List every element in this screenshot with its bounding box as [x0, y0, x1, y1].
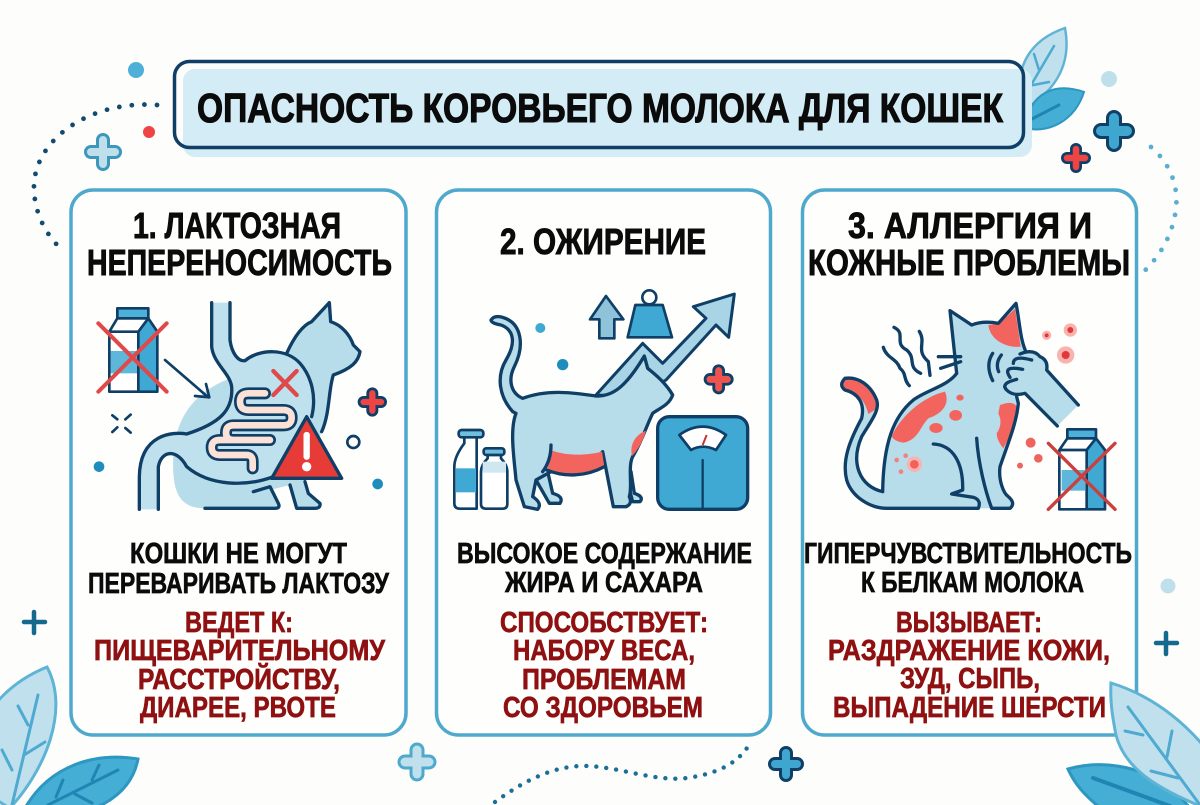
decoration: dotted arc left: [34, 105, 157, 248]
text: consequences: ВЫПАДЕНИЕ ШЕРСТИ: [833, 692, 1106, 724]
panel: allergy and skin problems: [802, 190, 1136, 735]
illustration: scratching cat: [842, 303, 1115, 509]
heading 2: 2. ОЖИРЕНИЕ: [500, 221, 706, 262]
leaves bottom right: [1068, 683, 1200, 805]
heading 1: [87, 205, 392, 283]
text: consequences: РАССТРОЙСТВУ,: [138, 662, 340, 696]
title: ОПАСНОСТЬ КОРОВЬЕГО МОЛОКА ДЛЯ КОШЕК: [197, 85, 1004, 131]
text: consequences: [500, 607, 708, 724]
weight: [628, 290, 672, 337]
dots: [94, 436, 383, 489]
panel: lactose intolerance: [71, 190, 406, 735]
small up arrow: [590, 296, 623, 338]
text: cause: К БЕЛКАМ МОЛОКА: [861, 567, 1084, 599]
text: consequences: СПОСОБСТВУЕТ:: [500, 607, 708, 639]
leaves top right: [1018, 28, 1084, 129]
red skin patches: [843, 308, 1021, 448]
illustration: overweight cat: [454, 290, 748, 509]
text: consequences: [828, 607, 1110, 724]
arrow to stomach: [165, 360, 209, 397]
icon: light plus top left: [91, 140, 115, 164]
text: consequences: [94, 607, 386, 724]
stink lines: [883, 327, 930, 386]
decoration: dotted wave bottom: [495, 748, 747, 802]
icon: light plus bottom: [405, 750, 429, 774]
heading 1: НЕПЕРЕНОСИМОСТЬ: [87, 242, 392, 283]
text: consequences: ПРОБЛЕМАМ: [522, 664, 686, 696]
heading 3: КОЖНЫЕ ПРОБЛЕМЫ: [808, 242, 1130, 283]
warning triangle: [272, 417, 342, 478]
decoration: pale dot right: [1160, 578, 1176, 594]
illustration: cat digestive system: [94, 303, 383, 509]
cat body: [842, 303, 1025, 508]
text: cause: [88, 538, 390, 600]
decoration: dotted arc right: [1139, 147, 1176, 276]
text: consequences: ВЫЗЫВАЕТ:: [896, 607, 1042, 639]
text: cause: КОШКИ НЕ МОГУТ: [130, 538, 347, 570]
cat body: [491, 317, 673, 509]
scratch marks: [989, 353, 1001, 381]
red plus: [710, 371, 727, 388]
text: cause: [804, 538, 1132, 599]
panel: obesity: [436, 190, 770, 735]
text: consequences: ЗУД, СЫПЬ,: [900, 663, 1040, 695]
milk bottles: [454, 430, 507, 509]
heading 3: 3. АЛЛЕРГИЯ И: [848, 205, 1092, 246]
rash spots on leg: [894, 453, 922, 474]
heading 3: [808, 205, 1130, 283]
text: consequences: ДИАРЕЕ, РВОТЕ: [140, 692, 336, 724]
icon: red plus top right: [1067, 149, 1085, 167]
decoration: blue dot: [128, 62, 144, 78]
floating rash dots: [1017, 323, 1077, 469]
milk carton crossed: [1048, 429, 1115, 509]
scratching arm and paw: [1004, 352, 1078, 426]
title banner: [174, 62, 1032, 157]
intestines: [212, 393, 292, 468]
icon: blue plus top right: [1101, 118, 1127, 144]
text: cause: ЖИРА И САХАРА: [504, 567, 703, 599]
cat silhouette: [173, 303, 360, 508]
text: consequences: НАБОРУ ВЕСА,: [513, 635, 695, 667]
scale: [658, 417, 748, 509]
sparks: [112, 415, 131, 433]
far legs: [536, 472, 641, 503]
red plus: [364, 393, 381, 411]
esophagus and stomach: [139, 303, 314, 509]
icon: blue plus bottom: [775, 753, 797, 775]
dots: [535, 323, 568, 370]
text: consequences: ПИЩЕВАРИТЕЛЬНОМУ: [94, 635, 386, 667]
decoration: red dot: [143, 126, 155, 138]
heading 1: 1. ЛАКТОЗНАЯ: [133, 205, 341, 246]
leaves bottom left: [0, 667, 138, 805]
text: cause: ПЕРЕВАРИВАТЬ ЛАКТОЗУ: [88, 568, 390, 600]
text: consequences: РАЗДРАЖЕНИЕ КОЖИ,: [828, 635, 1110, 667]
red cross: [273, 371, 297, 395]
text: consequences: ВЕДЕТ К:: [185, 607, 293, 639]
text: consequences: СО ЗДОРОВЬЕМ: [503, 692, 703, 724]
whiskers: [938, 357, 961, 368]
icon: thin plus left: [24, 612, 45, 633]
milk carton crossed: [98, 308, 167, 392]
decoration: pale dot top right: [1101, 71, 1117, 87]
cat outline: [842, 303, 1027, 508]
text: cause: [457, 538, 752, 599]
rising arrow: [596, 294, 734, 397]
text: cause: ВЫСОКОЕ СОДЕРЖАНИЕ: [457, 538, 752, 570]
belly fat: [547, 451, 604, 475]
icon: thin plus right: [1156, 633, 1177, 654]
